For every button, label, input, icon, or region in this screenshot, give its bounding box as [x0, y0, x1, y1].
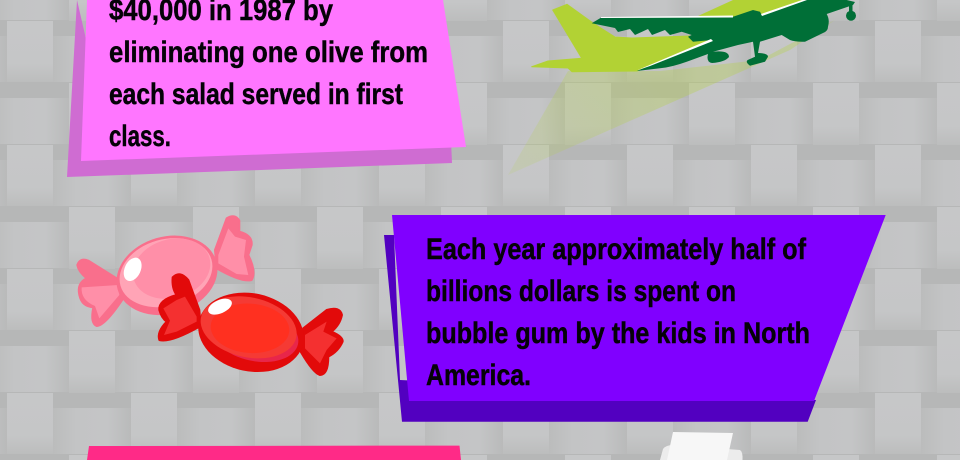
panel: bubble gum fact [384, 215, 886, 422]
icon: pink candy [77, 216, 254, 327]
panel: olive fact [67, 0, 466, 177]
text: bubble gum fact: America. [426, 359, 531, 392]
text: bubble gum fact: billions dollars is spent on [426, 275, 736, 308]
text: bubble gum fact: Each year approximately half of [426, 233, 807, 266]
text: olive fact [109, 0, 428, 153]
text: olive fact: class. [109, 120, 171, 153]
icon: red candy [159, 274, 343, 382]
text: bubble gum fact [426, 233, 810, 392]
icon: white paper [660, 432, 743, 460]
text: olive fact: eliminating one olive from [109, 36, 428, 69]
icon: airplane with light beam [508, 0, 856, 175]
text: olive fact: each salad served in first [109, 78, 403, 111]
panel: bottom pink banner [87, 446, 461, 460]
text: bubble gum fact: bubble gum by the kids in North [426, 317, 810, 350]
